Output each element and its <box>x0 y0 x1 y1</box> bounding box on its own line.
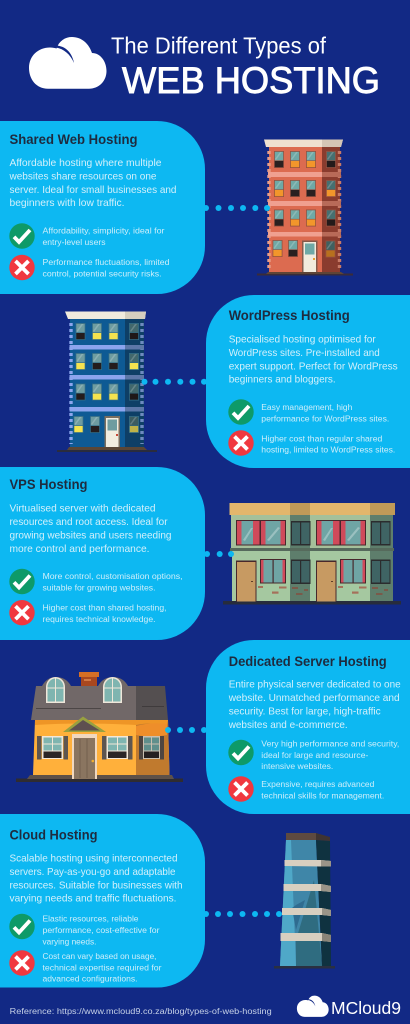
pros: wordpress hosting <box>261 403 389 423</box>
description: cloud hosting: Scalable hosting using interconnected <box>10 853 178 864</box>
icon: check <box>9 914 35 939</box>
description: dedicated server hosting <box>228 680 401 731</box>
heading: dedicated server hosting: Dedicated Server Hosting <box>229 653 387 669</box>
cons: cloud hosting <box>42 952 162 984</box>
cons: dedicated server hosting <box>261 780 384 800</box>
description: shared web hosting: beginners with low traffic. <box>10 198 124 209</box>
icon: cross <box>9 255 35 280</box>
icon: check <box>9 569 35 594</box>
cons: vps hosting: Higher cost than shared hosting, <box>42 604 166 613</box>
description: wordpress hosting: WordPress sites. Pre-installed and <box>229 348 380 359</box>
icon: cross <box>9 950 35 976</box>
description: wordpress hosting <box>229 335 398 386</box>
description: cloud hosting: varying needs and traffic fluctuations. <box>10 894 176 904</box>
pros: shared web hosting: entry-level users <box>42 238 106 247</box>
pros: wordpress hosting: performance for WordPress sites. <box>261 414 389 423</box>
description: shared web hosting <box>9 158 177 209</box>
pros: dedicated server hosting: intensive websites. <box>261 762 333 771</box>
cons: dedicated server hosting: technical skills for management. <box>261 792 384 800</box>
second townhouse unit <box>316 520 390 602</box>
cons: wordpress hosting: hosting, limited to WordPress sites. <box>261 446 395 454</box>
heading: cloud hosting: Cloud Hosting <box>10 826 98 842</box>
illustration: red brick apartment building <box>257 140 353 276</box>
reference link: Reference: https://www.mcloud9.co.za/blog/types-of-web-hosting <box>10 1006 272 1016</box>
panel: cloud hosting <box>0 814 205 988</box>
connector: cloud hosting dots <box>203 911 282 917</box>
title: WEB HOSTING <box>122 59 380 101</box>
icon: cross <box>9 600 35 625</box>
description: cloud hosting <box>10 853 182 904</box>
illustration: yellow house <box>16 672 183 782</box>
cons: vps hosting: requires technical knowledge. <box>42 615 156 624</box>
cons: cloud hosting: Cost can vary based on usage, <box>42 952 156 961</box>
cons: shared web hosting <box>42 258 170 278</box>
two units share the same elements <box>236 520 310 602</box>
pros: dedicated server hosting <box>261 740 399 771</box>
heading: vps hosting: VPS Hosting <box>10 476 88 492</box>
description: wordpress hosting: expert support. Perfect for WordPress <box>229 361 398 372</box>
description: cloud hosting: resources. Suitable for businesses with <box>10 880 182 891</box>
pros: dedicated server hosting: ideal for large and resource- <box>261 751 369 760</box>
illustration: blue apartment building <box>57 312 157 452</box>
cons: shared web hosting: control, potential security risks. <box>42 270 162 278</box>
title <box>111 32 380 101</box>
illustration: green duplex townhouses <box>223 503 401 604</box>
title: The Different Types of <box>111 32 327 58</box>
pros: vps hosting: More control, customisation options, <box>42 572 182 581</box>
panel: shared web hosting <box>0 121 205 294</box>
footer logo: mcloud9 <box>297 996 401 1018</box>
panel: vps hosting <box>0 467 205 640</box>
description: cloud hosting: servers. Pay-as-you-go and adaptable <box>10 867 176 878</box>
icon: cross <box>228 776 254 802</box>
connector: dedicated server hosting dots <box>165 727 207 733</box>
icon: check <box>9 223 35 249</box>
icon: cross <box>228 430 254 456</box>
description: shared web hosting: websites share resources on one <box>9 172 157 182</box>
connector: shared web hosting dots <box>203 205 270 211</box>
pros: cloud hosting: Elastic resources, reliable <box>42 915 139 924</box>
connector: wordpress hosting dots <box>142 379 207 385</box>
pros: cloud hosting: performance, cost-effective for <box>42 926 160 935</box>
cons: wordpress hosting <box>261 434 395 454</box>
panel: dedicated server hosting <box>206 640 410 814</box>
pros: vps hosting <box>42 572 182 592</box>
description: dedicated server hosting: website. Unmatched performance and <box>228 693 400 704</box>
pros: wordpress hosting: Easy management, high <box>261 403 352 412</box>
description: vps hosting: more control and performance. <box>10 544 150 555</box>
description: dedicated server hosting: security. Best for large, high-traffic <box>229 706 381 718</box>
description: wordpress hosting: beginners and bloggers. <box>229 374 336 386</box>
panel: wordpress hosting <box>206 295 410 468</box>
description: vps hosting <box>10 504 172 555</box>
description: dedicated server hosting: websites and e-commerce. <box>228 720 348 731</box>
cons: dedicated server hosting: Expensive, requires advanced <box>261 780 374 789</box>
cons: shared web hosting: Performance fluctuations, limited <box>42 258 170 267</box>
description: vps hosting: growing websites and users needing <box>10 530 172 542</box>
description: shared web hosting: server. Ideal for small businesses and <box>10 185 177 196</box>
heading: wordpress hosting: WordPress Hosting <box>229 307 350 323</box>
icon: check <box>228 399 254 425</box>
pros: shared web hosting: Affordability, simplicity, ideal for <box>42 226 165 236</box>
pros: cloud hosting: varying needs. <box>42 937 96 946</box>
footer logo: mcloud9: MCloud9 <box>331 998 401 1018</box>
connector: vps hosting dots <box>204 551 234 557</box>
cons: cloud hosting: advanced configurations. <box>42 974 138 984</box>
pros: cloud hosting <box>42 915 160 946</box>
cons: wordpress hosting: Higher cost than regular shared <box>261 434 382 443</box>
cons: vps hosting <box>42 604 166 624</box>
icon: cloud logo <box>29 37 106 89</box>
icon: check <box>228 740 254 765</box>
pros: shared web hosting <box>42 226 165 247</box>
cons: cloud hosting: technical expertise required for <box>42 963 162 972</box>
description: shared web hosting: Affordable hosting where multiple <box>10 158 162 169</box>
heading: shared web hosting: Shared Web Hosting <box>10 131 138 147</box>
illustration: glass skyscraper <box>274 833 335 968</box>
description: vps hosting: resources and root access. Ideal for <box>10 517 168 528</box>
description: wordpress hosting: Specialised hosting optimised for <box>229 335 376 346</box>
description: vps hosting: Virtualised server with dedicated <box>10 504 156 515</box>
pros: dedicated server hosting: Very high performance and security, <box>261 740 399 749</box>
pros: vps hosting: suitable for growing websites. <box>42 584 156 592</box>
description: dedicated server hosting: Entire physical server dedicated to one <box>229 680 401 691</box>
